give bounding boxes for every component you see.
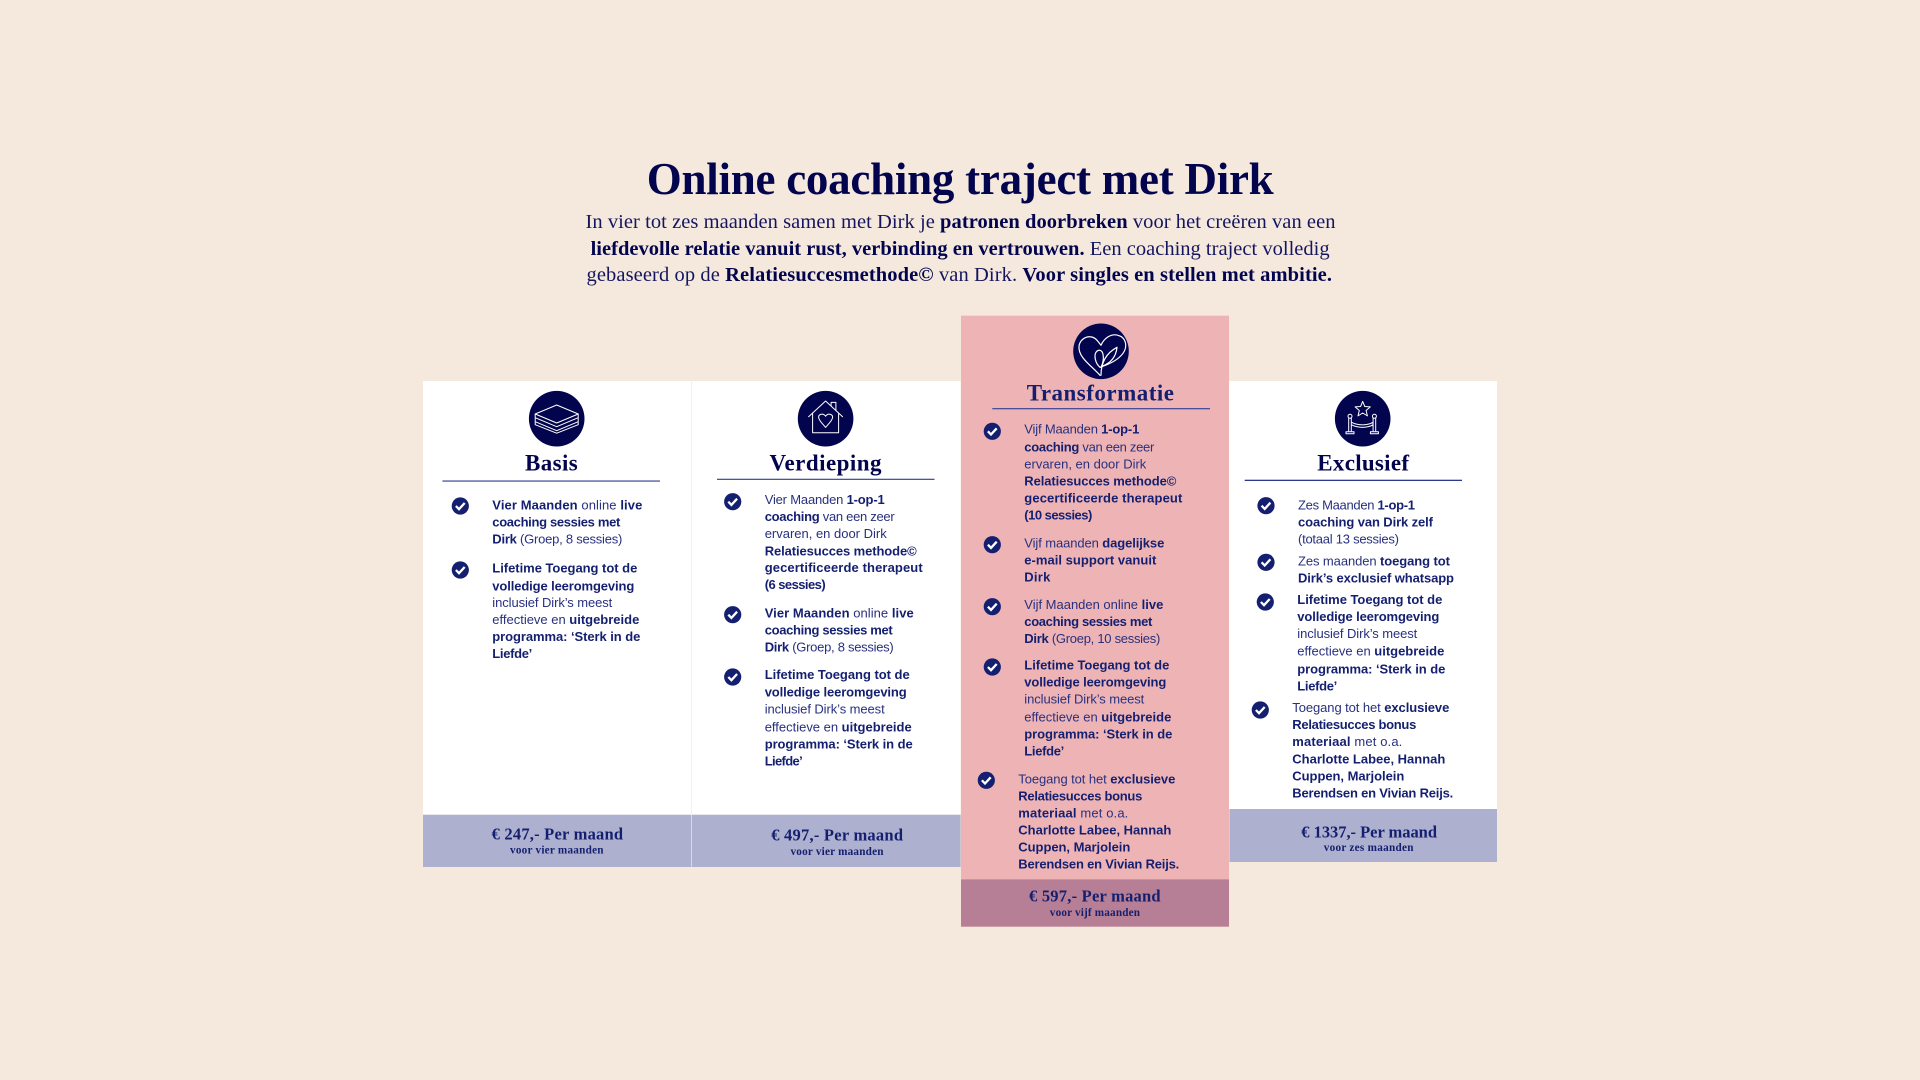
bullet text: Lifetime Toegang tot de xyxy=(1297,592,1442,607)
price bar: Exclusief: € 1337,- Per maand xyxy=(1301,823,1437,842)
price bar: Verdieping: € 497,- Per maand xyxy=(771,825,903,844)
price bar: Basis: voor vier maanden xyxy=(510,844,604,856)
bullet text: Relatiesucces methode© xyxy=(765,543,917,558)
bullet text xyxy=(1024,657,1172,758)
icon: house with heart xyxy=(798,391,853,446)
bullet text: coaching van een zeer xyxy=(1024,439,1155,454)
bullet text: volledige leeromgeving xyxy=(492,578,634,594)
bullet text: Charlotte Labee, Hannah xyxy=(1292,752,1445,766)
bullet text: Vijf Maanden online live xyxy=(1024,597,1163,612)
icon: stack of layers xyxy=(529,391,584,446)
bullet text: Lifetime Toegang tot de xyxy=(1024,657,1169,672)
bullet text: Zes maanden toegang tot xyxy=(1298,553,1451,568)
intro text: In vier tot zes maanden samen met Dirk je patronen doorbreken voor het creëren van een xyxy=(586,211,1336,233)
bullet: bonus material xyxy=(978,771,1179,871)
bullet text xyxy=(1298,497,1434,546)
icon: check xyxy=(724,493,741,510)
bullet text: inclusief Dirk’s meest xyxy=(1297,626,1418,641)
heading: Basis: Basis xyxy=(525,450,578,476)
bullet text xyxy=(1292,700,1453,800)
bullet text: volledige leeromgeving xyxy=(1024,674,1166,689)
bullet: lifetime access xyxy=(984,657,1172,758)
bullet text: Dirk xyxy=(1024,569,1051,584)
bullet text: inclusief Dirk’s meest xyxy=(765,701,885,716)
bullet text: ervaren, en door Dirk xyxy=(765,526,887,541)
intro text: liefdevolle relatie vanuit rust, verbinding en vertrouwen. Een coaching traject volledig xyxy=(591,238,1330,260)
bullet text: Vier Maanden online live xyxy=(492,497,642,512)
icon: heart with leaf xyxy=(1073,324,1129,379)
bullet text: ervaren, en door Dirk xyxy=(1024,456,1147,471)
bullet text: volledige leeromgeving xyxy=(765,684,907,699)
icon: check xyxy=(1257,554,1275,571)
heading rule xyxy=(992,408,1210,409)
bullet text: Vijf maanden dagelijkse xyxy=(1024,535,1164,550)
bullet text: Vier Maanden online live xyxy=(765,605,914,620)
icon: check xyxy=(978,772,995,789)
bullet text: Cuppen, Marjolein xyxy=(1018,839,1130,854)
bullet text: coaching van een zeer xyxy=(765,509,895,524)
bullet text: Berendsen en Vivian Reijs. xyxy=(1018,856,1179,871)
icon: check xyxy=(1257,497,1275,514)
heading rule xyxy=(442,480,660,482)
icon: star and rope barrier xyxy=(1335,391,1390,446)
price bar: Verdieping xyxy=(692,815,961,867)
bullet: live coaching xyxy=(724,605,914,654)
bullet text xyxy=(1297,592,1445,693)
bullet: daily e-mail support xyxy=(984,535,1164,584)
bullet: lifetime access xyxy=(1257,592,1445,693)
bullet text xyxy=(765,667,913,768)
bullet: live coaching xyxy=(452,497,642,547)
bullet: 1-op-1 coaching xyxy=(984,422,1183,522)
icon: check xyxy=(1252,701,1269,719)
intro text: gebaseerd op de Relatiesuccesmethode© van Dirk. Voor singles en stellen met ambitie. xyxy=(586,264,1332,286)
icon: check xyxy=(1257,593,1274,611)
bullet text: Lifetime Toegang tot de xyxy=(492,560,637,575)
bullet: 1-op-1 coaching xyxy=(724,492,923,592)
bullet text: Relatiesucces bonus xyxy=(1292,717,1416,732)
heading rule xyxy=(717,479,934,480)
bullet text: gecertificeerde therapeut xyxy=(765,560,923,575)
bullet: lifetime access xyxy=(724,667,913,768)
bullet text: materiaal met o.a. xyxy=(1292,734,1402,749)
bullet text: programma: ‘Sterk in de xyxy=(1297,661,1445,676)
bullet text xyxy=(765,605,914,654)
bullet text: Liefde’ xyxy=(1297,678,1337,693)
price bar: Verdieping: voor vier maanden xyxy=(790,846,884,858)
bullet text: effectieve en uitgebreide xyxy=(492,612,639,627)
bullet text: (10 sessies) xyxy=(1024,507,1092,522)
panel: Exclusief xyxy=(1229,381,1497,862)
icon: check xyxy=(984,423,1001,440)
bullet text: programma: ‘Sterk in de xyxy=(1024,726,1172,741)
bullet text xyxy=(1024,422,1183,522)
bullet: bonus material xyxy=(1252,700,1453,800)
bullet text: Berendsen en Vivian Reijs. xyxy=(1292,786,1453,800)
bullet text xyxy=(1024,535,1164,584)
heading: Exclusief: Exclusief xyxy=(1317,450,1409,476)
bullet text: Vier Maanden 1-op-1 xyxy=(765,492,885,507)
heading: Verdieping: Verdieping xyxy=(770,450,882,476)
bullet text: Liefde’ xyxy=(1024,743,1064,758)
bullet text: coaching van Dirk zelf xyxy=(1298,514,1434,529)
bullet text: Liefde’ xyxy=(765,753,803,768)
bullet text: Relatiesucces bonus xyxy=(1018,788,1142,803)
bullet text xyxy=(492,560,640,661)
bullet text: effectieve en uitgebreide xyxy=(765,719,912,734)
panel: Transformatie (highlighted) xyxy=(961,316,1229,927)
icon: check xyxy=(452,561,469,579)
bullet text: Charlotte Labee, Hannah xyxy=(1018,822,1171,837)
bullet: 1-op-1 coaching xyxy=(1257,497,1434,546)
price bar: Basis: € 247,- Per maand xyxy=(492,824,623,843)
bullet text: gecertificeerde therapeut xyxy=(1024,490,1183,505)
bullet text xyxy=(1024,597,1163,646)
bullet text: Zes Maanden 1-op-1 xyxy=(1298,497,1415,512)
bullet: live coaching xyxy=(984,597,1163,646)
icon: check xyxy=(452,497,469,515)
icon: check xyxy=(984,598,1001,615)
heading: Transformatie: Transformatie xyxy=(1027,380,1174,406)
heading rule xyxy=(1245,480,1462,481)
bullet text: inclusief Dirk’s meest xyxy=(1024,691,1145,706)
price bar: Transformatie: € 597,- Per maand xyxy=(1029,886,1161,905)
bullet text: effectieve en uitgebreide xyxy=(1297,643,1444,658)
panel: Verdieping xyxy=(692,381,961,867)
bullet text: Dirk’s exclusief whatsapp xyxy=(1298,570,1454,585)
bullet: whatsapp access xyxy=(1257,553,1454,585)
bullet text: coaching sessies met xyxy=(1024,614,1153,629)
bullet text: Dirk (Groep, 8 sessies) xyxy=(765,639,894,654)
bullet text: Dirk (Groep, 10 sessies) xyxy=(1024,631,1160,646)
bullet text: materiaal met o.a. xyxy=(1018,805,1128,820)
icon: check xyxy=(724,668,741,686)
bullet text xyxy=(765,492,923,592)
bullet text: Relatiesucces methode© xyxy=(1024,473,1177,488)
bullet text: Toegang tot het exclusieve xyxy=(1018,771,1175,786)
bullet text: programma: ‘Sterk in de xyxy=(492,629,640,644)
icon: check xyxy=(724,606,741,623)
bullet text: inclusief Dirk’s meest xyxy=(492,595,613,610)
intro text xyxy=(586,211,1336,286)
price bar: Transformatie xyxy=(961,879,1229,927)
bullet text: Liefde’ xyxy=(492,646,532,661)
bullet text: (totaal 13 sessies) xyxy=(1298,531,1399,546)
bullet text: volledige leeromgeving xyxy=(1297,609,1439,624)
bullet text: Cuppen, Marjolein xyxy=(1292,768,1404,784)
bullet text: effectieve en uitgebreide xyxy=(1024,709,1171,724)
bullet text: programma: ‘Sterk in de xyxy=(765,736,913,751)
bullet text xyxy=(1298,553,1454,585)
bullet text: coaching sessies met xyxy=(492,515,621,530)
price bar: Transformatie: voor vijf maanden xyxy=(1050,907,1141,919)
bullet text xyxy=(1018,771,1179,871)
bullet: lifetime access xyxy=(452,560,640,661)
bullet text: coaching sessies met xyxy=(765,622,893,637)
title: Online coaching traject met Dirk xyxy=(647,154,1274,204)
price bar: Basis xyxy=(423,815,691,867)
bullet text: Toegang tot het exclusieve xyxy=(1292,700,1449,715)
price bar: Exclusief: voor zes maanden xyxy=(1324,842,1414,854)
icon: check xyxy=(984,658,1001,676)
bullet text: (6 sessies) xyxy=(765,577,826,592)
bullet text: Vijf Maanden 1-op-1 xyxy=(1024,422,1139,437)
panel: Basis xyxy=(423,381,691,867)
price bar: Exclusief xyxy=(1230,809,1497,862)
icon: check xyxy=(984,536,1001,553)
bullet text: Lifetime Toegang tot de xyxy=(765,667,910,682)
bullet text: Dirk (Groep, 8 sessies) xyxy=(492,532,622,547)
bullet text: e-mail support vanuit xyxy=(1024,552,1157,567)
bullet text xyxy=(492,497,642,547)
